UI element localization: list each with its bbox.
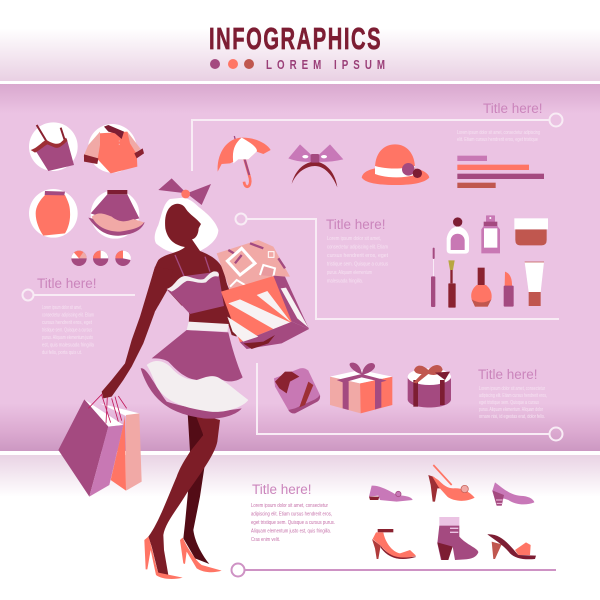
icon: lipstick bbox=[504, 272, 514, 307]
icon: ankle-strap heel bbox=[372, 529, 416, 559]
background: pink band bbox=[0, 84, 600, 451]
gift boxes in hand bbox=[217, 240, 309, 349]
text block: left: tristique sem. Quisque a cursus bbox=[42, 328, 92, 334]
icon: cream tube bbox=[525, 262, 544, 306]
icon: polo shirt bbox=[83, 124, 144, 173]
bodice bbox=[167, 255, 224, 314]
text block: middle: Title here! bbox=[326, 217, 386, 232]
skirt bbox=[141, 322, 248, 419]
icon: slingback heel bbox=[428, 465, 475, 502]
gift icons bbox=[274, 363, 451, 413]
head and shoulders bbox=[148, 204, 228, 306]
text block: left: purus. Aliquam elementum justo bbox=[42, 335, 93, 341]
text block: middle: Lorem ipsum dolor sit amet, bbox=[327, 236, 381, 242]
title: INFOGRAPHICS bbox=[209, 21, 382, 56]
icon: mascara brush bbox=[448, 260, 456, 308]
text block: bottom: Lorem ipsum dolor sit amet, consectetur bbox=[251, 503, 328, 509]
shopping bags bbox=[58, 393, 142, 497]
woman figure bbox=[58, 178, 309, 579]
text block: left: consectetur adipiscing elit. Etiam bbox=[42, 312, 94, 318]
text block: left: cursus hendrerit eros, eget bbox=[42, 320, 93, 326]
shoe icons bbox=[369, 465, 536, 560]
text block: left: dui felis, porta quis ut. bbox=[42, 350, 82, 356]
text block: left: est, quis malesuada fringilla bbox=[42, 342, 94, 348]
text block: bottom: Aliquam elementum justo est, quis fringilla. bbox=[251, 528, 331, 534]
icon: mascara wand bbox=[431, 248, 435, 307]
icon: spray bottle bbox=[481, 215, 500, 253]
icon: nail polish bbox=[471, 268, 492, 307]
text block: middle bbox=[326, 217, 389, 284]
icon: camisole top bbox=[29, 122, 78, 171]
icon: cream jar bbox=[514, 218, 548, 245]
right icons bbox=[362, 144, 548, 308]
icon: headband bbox=[288, 144, 343, 187]
clothes icons bbox=[29, 122, 145, 239]
text block: bottom: Title here! bbox=[252, 482, 312, 497]
text block: middle: cursus hendrerit eros, eget bbox=[327, 253, 389, 259]
text block: right: eget tristique sem. Quisque a cursus bbox=[479, 400, 539, 406]
text block: bottom bbox=[251, 482, 335, 543]
text block: middle: malesuada fringilla. bbox=[327, 278, 363, 284]
connector: right bbox=[257, 363, 562, 440]
text block: middle: consectetur adipiscing elit. Etiam bbox=[327, 244, 388, 250]
text block: right: ornare nisi, id egestas erat, dolor felis. bbox=[479, 414, 545, 420]
subtitle dots bbox=[210, 59, 254, 69]
background: floor gradient bbox=[0, 455, 600, 497]
text block: left: Lorem ipsum dolor sit amet, bbox=[42, 305, 82, 311]
icon: umbrella bbox=[218, 136, 271, 187]
legs and shoes bbox=[144, 413, 222, 579]
icon: mule heel bbox=[487, 534, 536, 559]
text block: bottom: adipiscing elit. Etiam cursus hendrerit eros, bbox=[251, 512, 332, 518]
pink gap beside bodice bbox=[150, 290, 189, 337]
text block: bottom: eget tristique sem. Quisque a cursus purus. bbox=[251, 520, 335, 526]
icon: round gift box bbox=[408, 365, 451, 407]
text block: right bbox=[478, 367, 547, 420]
text block: bottom: Cras enim velit. bbox=[251, 537, 280, 543]
text block: left bbox=[37, 276, 97, 356]
hair bow bbox=[158, 178, 211, 205]
icon: flat gift box bbox=[274, 368, 320, 413]
hair bbox=[155, 198, 218, 253]
arms and waist bbox=[102, 267, 237, 398]
text block: top right: Lorem ipsum dolor sit amet, consectetur adipiscing bbox=[457, 130, 540, 136]
connector: bottom bbox=[232, 564, 556, 576]
icon: layered skirt bbox=[88, 190, 145, 239]
icon: perfume bottle bbox=[447, 217, 469, 254]
icon: open gift box bbox=[330, 363, 392, 413]
bar chart bbox=[457, 156, 544, 188]
connector: left bbox=[22, 290, 135, 300]
text block: middle: tristique sem. Quisque a cursus bbox=[327, 262, 388, 268]
icon: striped heel bbox=[492, 482, 534, 506]
text block: right: Title here! bbox=[478, 367, 538, 382]
connector: middle bbox=[236, 214, 559, 319]
background: header gradient bbox=[0, 0, 600, 81]
subtitle: LOREM IPSUM bbox=[266, 59, 390, 72]
text block: top right: Title here! bbox=[483, 101, 543, 116]
pie charts bbox=[71, 251, 131, 266]
text block: top right bbox=[457, 101, 543, 143]
text block: top right: elit. Etiam cursus hendrerit eros, eget tristique bbox=[457, 137, 538, 143]
text block: right: purus. Aliquam elementum. Aliquam dolor bbox=[479, 407, 543, 413]
icon: pencil skirt bbox=[29, 189, 78, 238]
text block: right: adipiscing elit. Etiam cursus hendrerit eros, bbox=[479, 393, 547, 399]
text block: right: Lorem ipsum dolor sit amet, consectetur bbox=[479, 386, 545, 392]
icon: hat bbox=[362, 144, 429, 185]
text block: middle: purus. Aliquam elementum bbox=[327, 270, 372, 276]
connector: top bbox=[192, 114, 562, 171]
text block: left: Title here! bbox=[37, 276, 97, 291]
icon: ankle boot bbox=[437, 517, 478, 560]
icon: flat shoe bbox=[369, 486, 413, 502]
